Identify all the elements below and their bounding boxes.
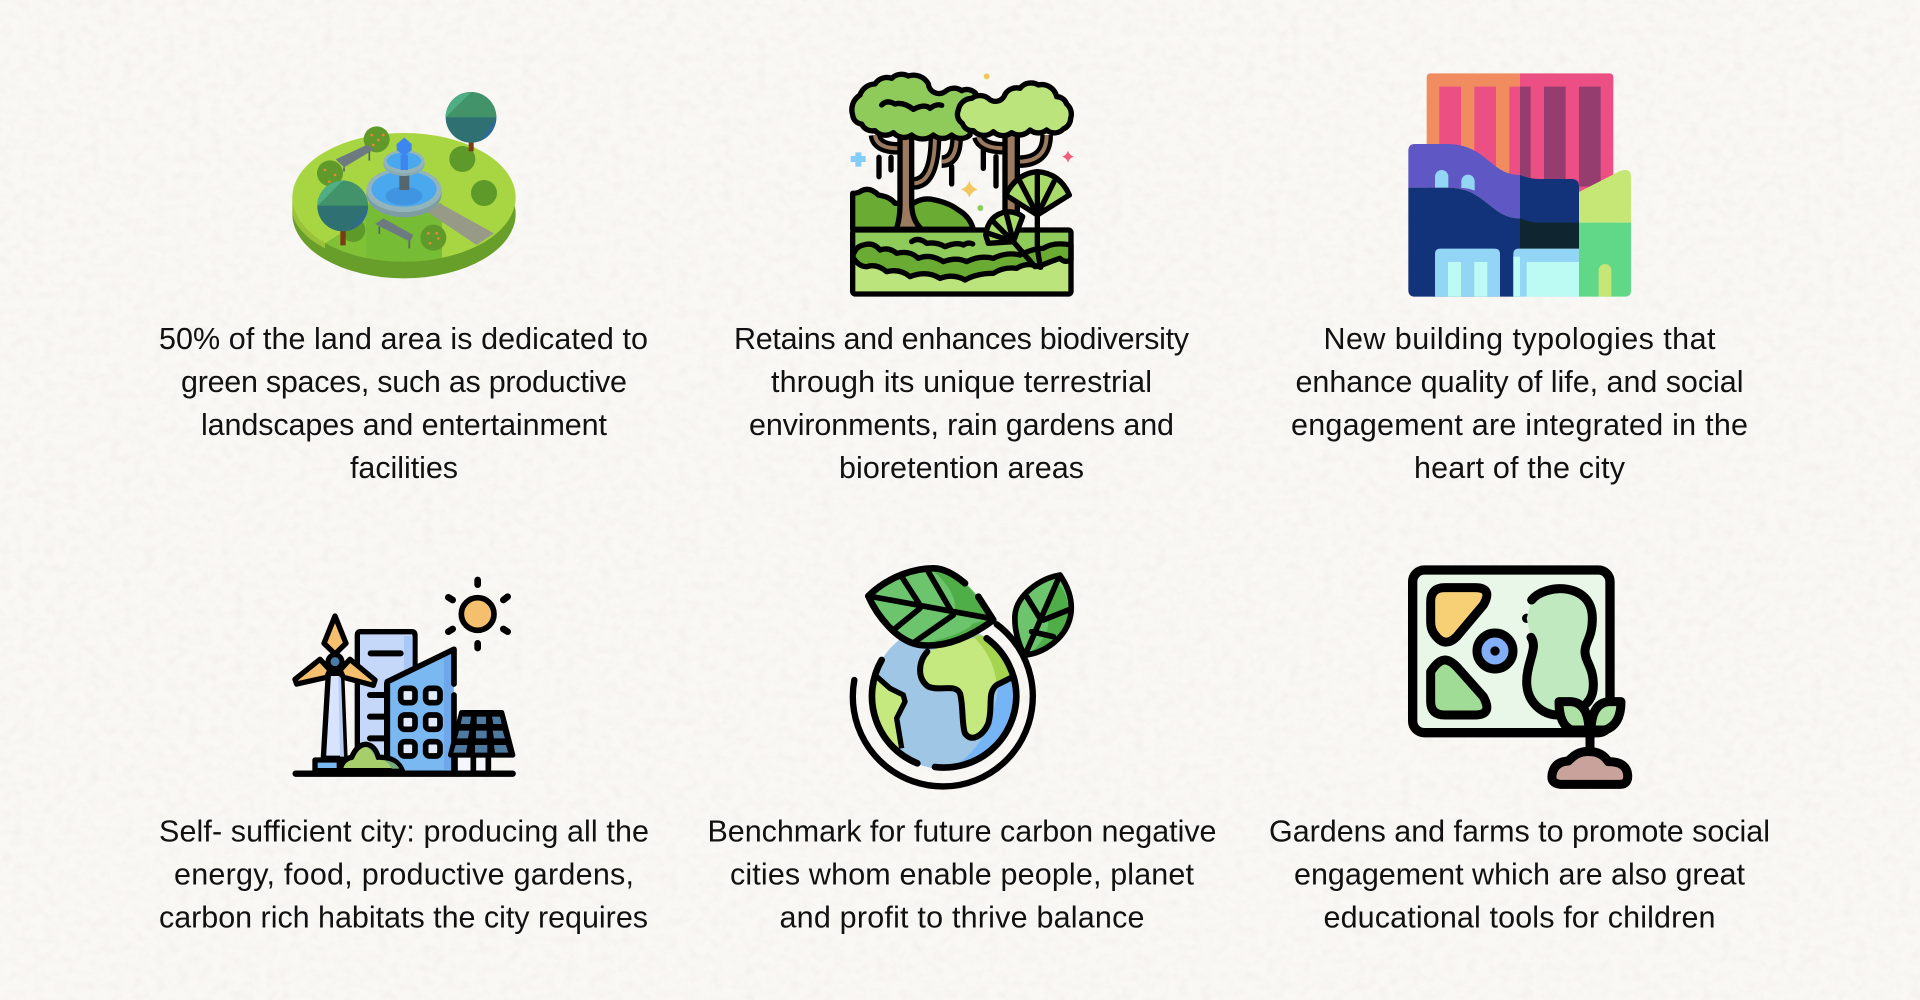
panel: building typologies	[1291, 73, 1748, 485]
text: self-sufficient city description	[159, 814, 649, 934]
text: self-sufficient city description: energy, food, productive gardens,	[174, 858, 634, 892]
text: building typologies description: heart of the city	[1414, 451, 1626, 485]
text: carbon negative description	[708, 814, 1216, 934]
text: biodiversity description	[734, 322, 1190, 485]
text: self-sufficient city description: Self- sufficient city: producing all the	[159, 814, 649, 848]
text: carbon negative description: and profit to thrive balance	[780, 900, 1144, 934]
icon: globe with leaves	[853, 568, 1071, 786]
text: green spaces description: landscapes and entertainment	[201, 408, 608, 442]
text: biodiversity description: environments, rain gardens and	[749, 408, 1174, 442]
icon: garden map with sprout	[1413, 570, 1628, 784]
text: building typologies description	[1291, 322, 1748, 485]
text: carbon negative description: Benchmark for future carbon negative	[708, 814, 1216, 848]
text: biodiversity description: through its unique terrestrial	[771, 365, 1152, 399]
icon: colourful buildings	[1408, 73, 1631, 297]
text: gardens and farms description	[1269, 814, 1770, 934]
text: carbon negative description: cities whom enable people, planet	[730, 858, 1195, 892]
text: green spaces description: 50% of the land area is dedicated to	[159, 322, 648, 356]
text: gardens and farms description: educational tools for children	[1324, 900, 1716, 934]
text: gardens and farms description: Gardens and farms to promote social	[1269, 814, 1770, 848]
panel: green spaces	[159, 90, 648, 485]
text: gardens and farms description: engagement which are also great	[1294, 858, 1746, 892]
text: building typologies description: enhance quality of life, and social	[1296, 365, 1744, 399]
panel: gardens and farms	[1269, 570, 1770, 934]
panel: self-sufficient city	[159, 580, 649, 934]
text: self-sufficient city description: carbon rich habitats the city requires	[159, 900, 648, 934]
panel: carbon negative benchmark	[708, 568, 1216, 934]
text: green spaces description: facilities	[350, 451, 458, 485]
icon: rainforest	[851, 73, 1074, 294]
text: biodiversity description: Retains and enhances biodiversity	[734, 322, 1190, 356]
icon: wind turbine, buildings and solar panel	[295, 580, 513, 774]
text: green spaces description	[159, 322, 648, 485]
text: green spaces description: green spaces, such as productive	[181, 365, 627, 399]
panel: biodiversity	[734, 73, 1190, 485]
text: building typologies description: New building typologies that	[1324, 322, 1716, 356]
icon: park with fountain	[292, 90, 516, 278]
text: biodiversity description: bioretention areas	[839, 451, 1084, 485]
text: building typologies description: engagement are integrated in the	[1291, 408, 1748, 442]
